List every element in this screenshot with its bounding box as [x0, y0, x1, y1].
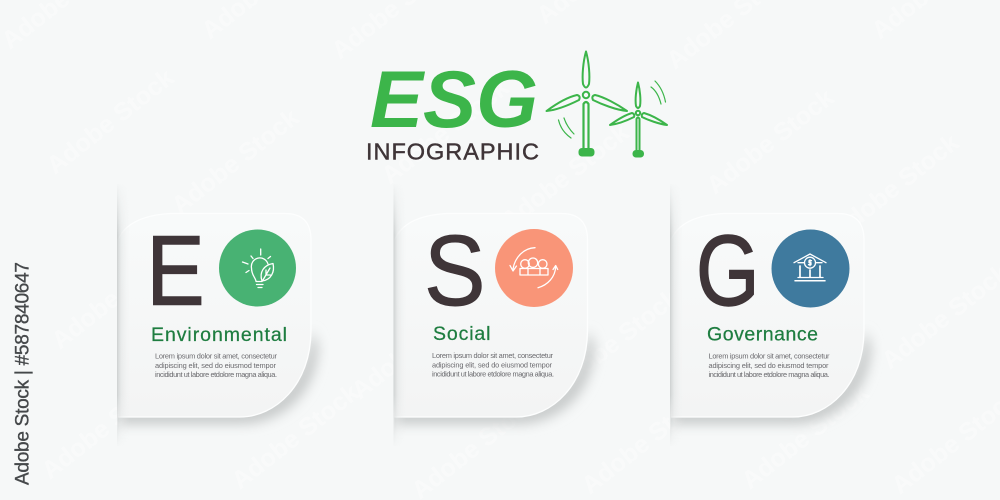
title: ESG: ESG — [370, 55, 538, 145]
watermark pattern: Adobe Stock — [826, 129, 964, 245]
text block: Lorem ipsum dolor sit amet, consectetur — [708, 352, 830, 360]
card — [671, 214, 864, 417]
icon: lightbulb with leaf — [219, 230, 296, 306]
heading: Social: Social — [433, 323, 490, 345]
panel: social — [394, 184, 594, 446]
panel edge shading — [670, 192, 678, 437]
text block: adipiscing elit, sed do eiusmod tempor — [155, 361, 277, 370]
title — [366, 55, 539, 164]
stock image id: Adobe Stock | #587840647 — [12, 262, 34, 485]
watermark pattern: Adobe Stock — [46, 239, 184, 355]
watermark pattern: Adobe Stock — [226, 379, 364, 495]
heading: Governance: Governance — [707, 324, 818, 346]
text block: incididunt ut labore etdolore magna aliqua. — [432, 370, 554, 379]
rotation swooshes — [558, 81, 666, 138]
letter E: E — [146, 216, 204, 326]
large turbine — [546, 52, 627, 156]
watermark pattern: Adobe Stock — [346, 289, 484, 405]
letter G: G — [696, 215, 760, 327]
panel backing shadow — [671, 330, 871, 424]
watermark pattern: Adobe Stock — [576, 384, 714, 500]
watermark pattern: Adobe Stock — [736, 379, 874, 495]
icon: people with cycle arrows — [495, 229, 573, 307]
small turbine — [610, 82, 667, 156]
watermark pattern: Adobe Stock — [41, 64, 179, 180]
panel: environmental — [117, 184, 318, 446]
watermark pattern: Adobe Stock — [546, 284, 684, 400]
panel edge shading — [117, 192, 124, 437]
watermark pattern: Adobe Stock — [36, 369, 174, 485]
icon: bank building — [772, 230, 850, 308]
text block: adipiscing elit, sed do eiusmod tempor — [432, 360, 553, 369]
icon: wind turbines — [546, 52, 667, 156]
panel backing shadow — [394, 330, 594, 424]
text block: incididunt ut labore etdolore magna aliqua. — [155, 370, 277, 379]
text block: adipiscing elit, sed do eiusmod tempor — [708, 361, 829, 370]
watermark pattern: Adobe Stock — [701, 84, 839, 200]
panel edge shading — [394, 193, 401, 438]
letter S: S — [424, 215, 486, 327]
panel backing shadow — [118, 330, 318, 424]
card — [118, 214, 311, 417]
text block: Lorem ipsum dolor sit amet, consectetur — [432, 351, 554, 360]
watermark pattern: Adobe Stock — [166, 104, 304, 220]
watermark pattern: Adobe Stock — [376, 74, 514, 190]
text block: Lorem ipsum dolor sit amet, consectetur — [155, 352, 278, 360]
subtitle: INFOGRAPHIC: INFOGRAPHIC — [366, 138, 539, 164]
panel: governance — [670, 184, 871, 446]
card — [394, 214, 588, 417]
text block: incididunt ut labore etdolore magna aliqua. — [708, 370, 830, 379]
watermark pattern: Adobe Stock — [496, 119, 634, 235]
heading: Environmental: Environmental — [151, 324, 287, 346]
